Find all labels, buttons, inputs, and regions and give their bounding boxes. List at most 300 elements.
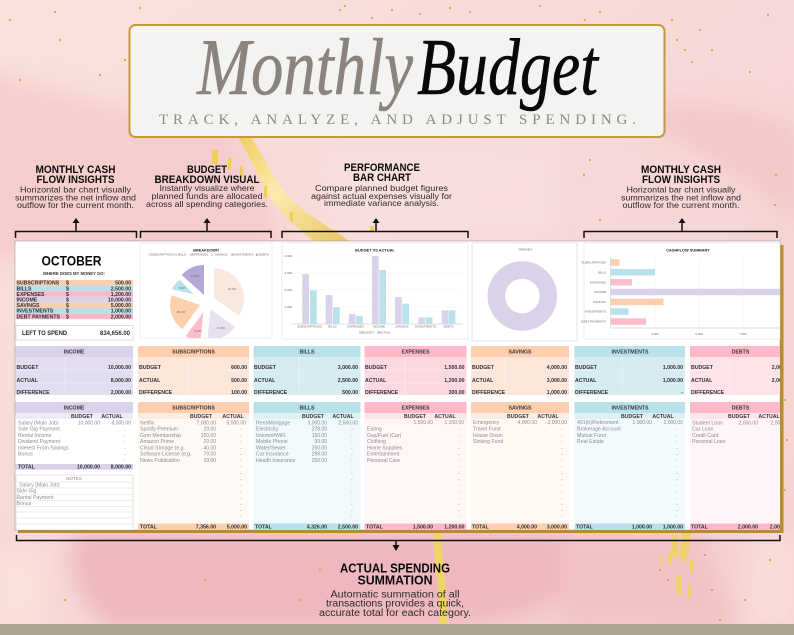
summary: income: 2,000.00 [111, 390, 131, 396]
detail: income: 8,000.00 [112, 420, 131, 426]
detail: expenses: ACTUAL [434, 414, 456, 420]
october summary: $ [66, 314, 69, 320]
detail: bills: 99.00 [314, 439, 327, 445]
detail: bills: 3,000.00 [308, 420, 327, 426]
summary: subscriptions: DIFFERENCE [139, 390, 173, 396]
summary: income [16, 346, 133, 396]
summary: subscriptions: BUDGET [139, 365, 162, 371]
notes box: Rental Payment [16, 495, 54, 501]
category labels: DEBTS [443, 324, 454, 328]
detail: expenses: Clothing [367, 439, 386, 445]
summary: debts: DEBTS [732, 349, 750, 355]
october summary: 1,000.00 [111, 309, 131, 315]
summary: bills [254, 346, 360, 396]
detail: debts: 2,000.00 [771, 420, 790, 426]
summary: expenses: 300.00 [449, 390, 465, 396]
cashflow bars [611, 259, 780, 325]
callout: actual spending summation: SUMMATION [358, 574, 432, 588]
detail: expenses: Eating [367, 426, 382, 432]
detail: savings: 4,000.00 [517, 524, 537, 530]
detail: debts: ACTUAL [758, 414, 780, 420]
callout: performance bar chart: PERFORMANCE [344, 162, 420, 174]
callout: monthly cash flow insights, right: FLOW INSIGHTS [642, 174, 720, 186]
pie legend: BILLS [178, 253, 186, 257]
summary: expenses [364, 346, 466, 396]
pie percentages: 8.3% [195, 329, 202, 333]
arrow and bracket: right insights [584, 218, 777, 238]
callout: budget breakdown visual: Instantly visualize where [160, 183, 255, 193]
callout: actual spending summation: accurate total for each category. [319, 608, 471, 619]
pie legend [148, 253, 269, 257]
detail: expenses: 1,500.00 [413, 524, 433, 530]
detail: investments: 1,000.00 [633, 420, 652, 426]
detail: income: 10,000.00 [77, 465, 100, 471]
detail: subscriptions: Spotify Premium [140, 426, 178, 432]
summary: expenses: 1,200.00 [444, 378, 465, 384]
detail: debts [690, 402, 780, 530]
category labels [297, 324, 454, 328]
detail: debts: 2,000.00 [739, 420, 758, 426]
arrow and bracket: performance [282, 218, 468, 238]
cashflow category labels: BILLS [598, 270, 606, 274]
summary: investments: DIFFERENCE [575, 390, 609, 396]
summary: bills: BILLS [300, 349, 315, 355]
summary: bills: 500.00 [342, 390, 358, 396]
detail: bills: BILLS [300, 405, 315, 411]
detail: bills: TOTAL [255, 524, 273, 530]
summary: income: DIFFERENCE [16, 390, 50, 396]
october summary: $ [66, 286, 69, 292]
summary: bills: ACTUAL [254, 378, 276, 384]
callout: performance bar chart: Compare planned budget figures [315, 183, 448, 193]
detail: income: ACTUAL [101, 414, 123, 420]
pie percentages: 5.8% [179, 286, 186, 290]
summary: expenses: EXPENSES [402, 349, 430, 355]
notes box: Salary (Main Job) [19, 482, 60, 488]
detail: investments: 1,000.00 [664, 420, 683, 426]
detail: savings [471, 402, 569, 530]
detail: subscriptions: 29.00 [203, 439, 216, 445]
detail: subscriptions: 7,000.00 [197, 420, 216, 426]
detail: savings: 3,000.00 [547, 524, 567, 530]
arrow and bracket: left insights [16, 218, 136, 238]
detail: subscriptions: ACTUAL [222, 414, 244, 420]
detail: savings: Sinking Fund [473, 439, 503, 445]
detail: investments: TOTAL [576, 524, 594, 530]
detail: expenses: 1,200.00 [444, 524, 465, 530]
detail: income: ------ [124, 426, 126, 464]
actual bars [310, 270, 455, 324]
pie legend: SAVINGS [214, 253, 228, 257]
bar legend: BUDGET [362, 331, 374, 335]
detail: savings: 3,000.00 [548, 420, 567, 426]
detail: bills: Water/Sewer [256, 445, 286, 451]
summary: debts: 2,000.00 [772, 378, 792, 384]
pie slices [170, 265, 244, 342]
detail: debts: TOTAL [691, 524, 709, 530]
cashflow category labels: INCOME [594, 290, 606, 294]
detail: debts: BUDGET [728, 414, 751, 420]
detail: income: Side Gig Payment [18, 426, 60, 432]
detail: subscriptions: --------------- [240, 426, 242, 520]
cashflow category labels: DEBT PAYMENTS [581, 320, 606, 324]
detail: income: Dividend Payment [18, 439, 61, 445]
detail: subscriptions: 40.00 [203, 445, 216, 451]
detail: expenses: Gas/Fuel (Car) [367, 433, 402, 439]
detail: bills: 299.00 [312, 452, 327, 458]
arrow and bracket: actual spending [16, 535, 780, 551]
october summary: SAVINGS [16, 303, 40, 309]
detail: debts: Car Loan [692, 426, 713, 432]
summary: investments [574, 346, 685, 396]
callout: actual spending summation: ACTUAL SPENDING [340, 562, 450, 576]
horizontal bar chart: cashflow summary [581, 243, 780, 339]
detail: subscriptions: Amazon Prime [140, 439, 174, 445]
summary: subscriptions: 600.00 [231, 365, 247, 371]
cashflow category labels [581, 260, 606, 324]
summary: subscriptions: 100.00 [231, 390, 247, 396]
cashflow category labels: SUBSCRIPTIONS [581, 260, 606, 264]
october summary: SUBSCRIPTIONS [16, 281, 60, 287]
summary: expenses: DIFFERENCE [365, 390, 399, 396]
callout: performance bar chart: against actual expenses visually for [311, 191, 452, 201]
detail: investments: Mutual Fund [577, 433, 606, 439]
callout: monthly cash flow insights, left: outflow for the current month. [17, 200, 134, 210]
subtitle: TRACK, ANALYZE, AND ADJUST SPENDING. [159, 112, 636, 128]
detail: bills [254, 402, 360, 530]
cashflow axis labels: 2,500 [651, 332, 659, 336]
detail: bills: 150.00 [312, 433, 327, 439]
category labels: SAVINGS [395, 324, 409, 328]
october summary: LEFT TO SPEND [22, 330, 67, 337]
pie legend: SUBSCRIPTIONS [150, 253, 174, 257]
october summary: 5,000.00 [111, 303, 131, 309]
summary: investments: 1,000.00 [663, 365, 683, 371]
callout: monthly cash flow insights, right: Horizontal bar chart visually [626, 184, 736, 194]
summary: investments: BUDGET [575, 365, 598, 371]
summary: investments: INVESTMENTS [612, 349, 649, 355]
cashflow axis labels: 7,500 [739, 332, 747, 336]
dashboard panel [15, 241, 792, 533]
detail: debts: Student Loan [692, 420, 723, 426]
callout: monthly cash flow insights, left: FLOW INSIGHTS [36, 174, 114, 186]
detail: savings: --------------- [561, 426, 563, 520]
october summary: 500.00 [115, 281, 131, 287]
detail: debts: DEBTS [732, 405, 750, 411]
detail: income: BUDGET [71, 414, 94, 420]
detail: savings: House Down [473, 433, 503, 439]
pie chart: breakdown: BREAKDOWN [193, 248, 219, 252]
october summary: EXPENSES [16, 292, 45, 298]
detail tables row [16, 402, 790, 530]
cashflow category labels: SAVINGS [593, 300, 606, 304]
notes box: NOTES [66, 476, 82, 481]
detail: bills: Car Insurance [256, 452, 289, 458]
october summary: DEBT PAYMENTS [16, 314, 61, 320]
bar chart: budget vs actual: BUDGET VS ACTUAL [355, 248, 395, 252]
detail: bills: 2,500.00 [339, 420, 358, 426]
detail: bills: 2,500.00 [338, 524, 358, 530]
summary tables row [16, 346, 792, 396]
notes box [16, 475, 133, 530]
pie percentages [177, 274, 237, 333]
bottom taupe band [0, 624, 794, 635]
bar legend [359, 331, 391, 335]
detail: savings: BUDGET [507, 414, 530, 420]
summary: savings: SAVINGS [509, 349, 532, 355]
cashflow axis labels: 5,000 [695, 332, 703, 336]
callout: monthly cash flow insights, right: summarizes the net inflow and [621, 192, 741, 202]
bar chart: budget vs actual [282, 243, 468, 339]
summary: income: 8,000.00 [111, 378, 131, 384]
detail: debts: Credit Card [692, 433, 719, 439]
pie percentages: 34.3% [228, 287, 237, 291]
detail: subscriptions: 150.00 [201, 433, 216, 439]
october summary: $ [66, 309, 69, 315]
notes box: Bonus [16, 501, 32, 507]
summary: bills: BUDGET [254, 365, 277, 371]
detail: bills: --------------- [351, 426, 353, 520]
callout: monthly cash flow insights, right: MONTHLY CASH [641, 164, 721, 176]
detail: subscriptions: Gym Membership [140, 433, 181, 439]
callout: monthly cash flow insights, right: outflow for the current month. [622, 200, 740, 210]
detail: investments: 1,000.00 [632, 524, 652, 530]
detail: bills: Rent/Mortgage [256, 420, 290, 426]
detail: subscriptions: 7,356.00 [196, 524, 216, 530]
october summary: INVESTMENTS [16, 309, 54, 315]
summary: income: BUDGET [16, 365, 39, 371]
category labels: BILLS [328, 324, 337, 328]
category labels: EXPENSES [347, 324, 364, 328]
october summary: WHERE DOES MY MONEY GO: [43, 271, 106, 276]
cashflow axis labels [610, 332, 747, 336]
detail: subscriptions: 79.00 [203, 452, 216, 458]
detail: expenses: Home Supplies [367, 445, 403, 451]
october summary: 1,200.00 [111, 292, 131, 298]
callout: budget breakdown visual: planned funds are allocated [152, 191, 263, 201]
detail: bills: BUDGET [302, 414, 325, 420]
callout: monthly cash flow insights, left [15, 164, 136, 210]
detail: income: 8,000.00 [111, 465, 131, 471]
detail: investments: BUDGET [621, 414, 644, 420]
summary: income: ACTUAL [16, 378, 39, 384]
callout: actual spending summation [319, 562, 471, 619]
detail: bills: Electricity [256, 426, 279, 432]
detail: investments: --------------- [676, 426, 678, 520]
detail: bills: 250.00 [312, 445, 327, 451]
detail: subscriptions: 5,000.00 [227, 420, 246, 426]
summary: debts: 2,000.00 [772, 365, 792, 371]
detail: investments: Brokerage Account [577, 426, 621, 432]
detail: income: Bonus [18, 452, 33, 458]
detail: subscriptions: SUBSCRIPTIONS [172, 405, 215, 411]
summary: savings: 3,000.00 [547, 378, 567, 384]
detail: debts: 2,000.00 [738, 524, 758, 530]
summary: bills: DIFFERENCE [254, 390, 288, 396]
summary: savings: ACTUAL [472, 378, 494, 384]
donut chart [472, 243, 577, 341]
category labels: SUBSCRIPTIONS [297, 324, 322, 328]
summary: subscriptions: ACTUAL [139, 378, 161, 384]
detail: expenses: Entertainment [367, 452, 400, 458]
pie legend: EXPENSES [192, 253, 208, 257]
cashflow category labels: INVESTMENTS [585, 310, 606, 314]
october summary: OCTOBER [42, 254, 102, 268]
y axis labels: 2,000 [284, 288, 292, 292]
callout: budget breakdown visual: BUDGET [187, 164, 227, 176]
summary: income: 10,000.00 [108, 365, 131, 371]
detail: savings: SAVINGS [509, 405, 532, 411]
october summary [16, 254, 133, 340]
pie percentages: 17.0% [217, 326, 226, 330]
detail: bills: ACTUAL [332, 414, 354, 420]
detail: income [16, 402, 133, 530]
summary: subscriptions: 500.00 [231, 378, 247, 384]
detail: income: INCOME [64, 405, 85, 411]
detail: expenses: 1,500.00 [414, 420, 433, 426]
arrow and bracket: breakdown [140, 218, 271, 238]
summary: debts: ACTUAL [691, 378, 713, 384]
y axis labels: 4,000 [284, 254, 292, 258]
callout: budget breakdown visual: BREAKDOWN VISUAL [154, 174, 260, 186]
summary: bills: 2,500.00 [338, 378, 358, 384]
pie chart: breakdown [140, 243, 272, 342]
pie percentages: 13.6% [191, 274, 200, 278]
marble plate [130, 25, 664, 137]
detail: savings: TOTAL [472, 524, 490, 530]
callout: actual spending summation: Automatic summation of all [330, 590, 460, 600]
callout: monthly cash flow insights, left: summarizes the net inflow and [15, 192, 136, 202]
category labels: INVESTMENTS [415, 324, 436, 328]
pie legend: DEBTS [259, 253, 269, 257]
summary: savings: 4,000.00 [547, 365, 567, 371]
summary: savings: 1,000.00 [547, 390, 567, 396]
pie legend: INVESTMENTS [232, 253, 254, 257]
y axis labels [284, 254, 292, 326]
detail: bills: Internet/WiFi [256, 433, 285, 439]
summary: debts [690, 346, 780, 395]
callout: monthly cash flow insights, left: Horizontal bar chart visually [20, 184, 132, 194]
detail: subscriptions [138, 402, 249, 530]
detail: savings: 4,000.00 [518, 420, 537, 426]
cashflow category labels: EXPENSES [590, 280, 606, 284]
callout: monthly cash flow insights, left: MONTHLY CASH [36, 164, 116, 176]
horizontal bar chart: cashflow summary: CASHFLOW SUMMARY [666, 248, 710, 252]
detail: expenses: Personal Care [367, 458, 400, 464]
title: Monthly: Monthly [196, 24, 413, 112]
summary: expenses: 1,500.00 [444, 365, 465, 371]
callout: performance bar chart: BAR CHART [353, 172, 411, 184]
title: Budget: Budget [417, 24, 599, 112]
detail: savings: Travel Fund [473, 426, 501, 432]
detail: subscriptions: 29.00 [203, 426, 216, 432]
detail: subscriptions: News Publication [140, 458, 180, 464]
callout: monthly cash flow insights, right [621, 164, 741, 210]
detail: debts: 2,000.00 [770, 524, 790, 530]
detail: bills: Health Insurance [256, 458, 295, 464]
summary: debts: DIFFERENCE [691, 390, 725, 396]
detail: investments: 1,000.00 [663, 524, 683, 530]
notes box: Side Gig [16, 489, 37, 495]
detail: bills: 4,326.00 [307, 524, 327, 530]
callout: budget breakdown visual: across all spending categories. [146, 199, 268, 209]
summary: investments: 1,000.00 [663, 378, 683, 384]
detail: bills: 250.00 [312, 458, 327, 464]
summary: savings: DIFFERENCE [472, 390, 506, 396]
summary: savings [471, 346, 569, 396]
gold panel shadow [18, 245, 784, 533]
summary: subscriptions [138, 346, 249, 396]
summary: subscriptions: SUBSCRIPTIONS [172, 349, 215, 355]
october summary: 2,000.00 [111, 314, 131, 320]
detail: investments: 401(k)/Retirement [577, 420, 619, 426]
summary: investments: ACTUAL [575, 378, 597, 384]
detail: bills: Mobile Phone [256, 439, 288, 445]
detail: expenses: EXPENSES [402, 405, 430, 411]
cashflow axis labels: - [610, 332, 612, 336]
october summary: $ [66, 292, 69, 298]
detail: subscriptions: TOTAL [140, 524, 158, 530]
callout: performance bar chart: immediate variance analysis. [324, 198, 439, 208]
callout: actual spending summation: transactions provides a quick, [326, 598, 464, 610]
detail: subscriptions: Cloud Storage (e.g. [140, 445, 185, 451]
bar legend: ACTUAL [379, 331, 391, 335]
detail: subscriptions: Software License (e.g. [140, 452, 192, 458]
budget bars [302, 256, 448, 324]
detail: investments [574, 402, 685, 530]
october summary: INCOME [16, 298, 38, 304]
detail: subscriptions: Netflix [140, 420, 155, 426]
october summary: $ [66, 298, 69, 304]
y axis labels: 3,000 [284, 271, 292, 275]
detail: subscriptions: BUDGET [190, 414, 213, 420]
detail: subscriptions: 5,000.00 [227, 524, 247, 530]
donut chart: MONEY [521, 247, 533, 251]
y axis labels: - [291, 322, 292, 326]
detail: expenses: TOTAL [366, 524, 384, 530]
detail: savings: ACTUAL [537, 414, 559, 420]
white sheet [15, 241, 780, 530]
detail: investments: INVESTMENTS [612, 405, 649, 411]
detail: debts: Personal Loan [692, 439, 726, 445]
summary: expenses: ACTUAL [365, 378, 387, 384]
detail: expenses [364, 402, 466, 530]
detail: expenses: 1,200.00 [445, 420, 464, 426]
summary: bills: 3,000.00 [338, 365, 358, 371]
detail: savings: Emergency [473, 420, 500, 426]
detail: investments: ACTUAL [652, 414, 674, 420]
y axis labels: 1,000 [284, 305, 292, 309]
summary: investments: - [681, 390, 683, 396]
detail: expenses: --------------- [458, 426, 460, 520]
detail: income: 10,000.00 [78, 420, 100, 426]
october summary: BILLS [16, 286, 32, 292]
detail: income: Rental Income [18, 433, 52, 439]
callout: performance bar chart [311, 162, 452, 208]
category labels: INCOME [373, 324, 385, 328]
october summary: $ [66, 303, 69, 309]
callout: budget breakdown visual [146, 164, 268, 209]
detail: investments: Real Estate [577, 439, 604, 445]
summary: savings: BUDGET [472, 365, 495, 371]
detail: income: Interest From Savings [18, 445, 69, 451]
detail: subscriptions: 29.00 [203, 458, 216, 464]
detail: income: Salary (Main Job) [18, 420, 59, 426]
october summary: $ [66, 281, 69, 287]
title card [130, 24, 664, 137]
summary: expenses: BUDGET [365, 365, 388, 371]
summary: income: INCOME [64, 349, 85, 355]
